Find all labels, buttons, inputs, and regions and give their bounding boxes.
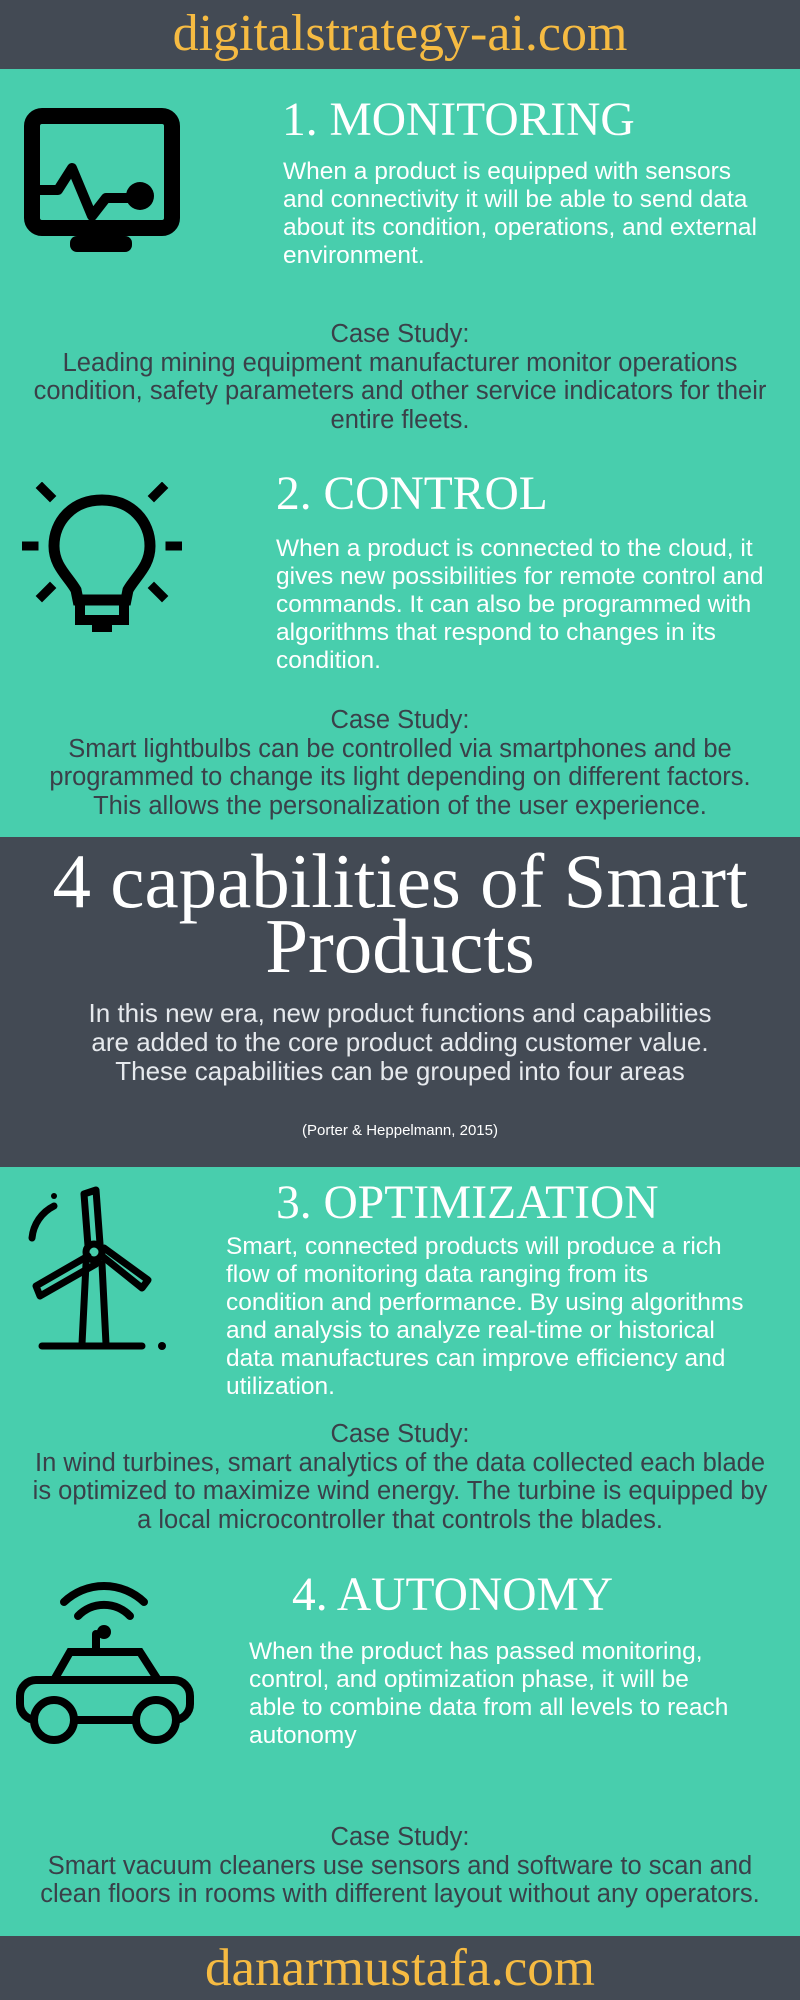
case study 3: Case Study: <box>331 1420 469 1448</box>
text: optimization: data manufactures can improve efficiency and <box>226 1345 725 1372</box>
text: control: condition. <box>276 647 381 674</box>
case study 4 <box>40 1823 760 1908</box>
heading: optimization: 3. OPTIMIZATION <box>276 1177 659 1229</box>
heading: monitoring: 1. MONITORING <box>282 94 635 146</box>
heading: control: 2. CONTROL <box>276 468 548 520</box>
text: autonomy: autonomy <box>249 1722 357 1749</box>
icon: wind turbine <box>28 1186 166 1350</box>
main title: Products <box>265 903 535 989</box>
case study 2: Case Study: <box>331 706 469 734</box>
icon: monitor <box>24 108 180 252</box>
footer bar <box>0 1936 800 2000</box>
case study 1 <box>34 320 766 434</box>
header bar: digitalstrategy-ai.com <box>173 5 627 62</box>
case study 4: clean floors in rooms with different layout without any operators. <box>40 1880 760 1908</box>
text: optimization: and analysis to analyze real-time or historical <box>226 1317 715 1344</box>
text: optimization: condition and performance. By using algorithms <box>226 1289 744 1316</box>
case study 1: entire fleets. <box>331 406 469 434</box>
main title <box>53 838 748 989</box>
icon: connected car <box>16 1582 194 1744</box>
text: autonomy: When the product has passed monitoring, <box>249 1638 703 1665</box>
text: monitoring: environment. <box>283 242 425 269</box>
intro text: In this new era, new product functions and capabilities <box>89 998 711 1028</box>
text: autonomy <box>249 1638 728 1749</box>
case study 1: Case Study: <box>331 320 469 348</box>
case study 3: a local microcontroller that controls the blades. <box>137 1506 663 1534</box>
intro text: These capabilities can be grouped into four areas <box>115 1056 685 1086</box>
text: optimization: flow of monitoring data ranging from its <box>226 1261 648 1288</box>
text: monitoring: about its condition, operations, and external <box>283 214 757 241</box>
header bar <box>0 0 800 69</box>
text: control <box>276 535 764 674</box>
icon: lightbulb <box>22 482 182 632</box>
case study 2: Smart lightbulbs can be controlled via smartphones and be <box>68 734 732 762</box>
case study 2 <box>49 706 751 820</box>
text: optimization: utilization. <box>226 1373 335 1400</box>
text: control: algorithms that respond to changes in its <box>276 619 716 646</box>
intro text <box>89 998 711 1086</box>
case study 3: In wind turbines, smart analytics of the data collected each blade <box>35 1448 765 1476</box>
text: control: gives new possibilities for remote control and <box>276 563 764 590</box>
text: monitoring: When a product is equipped with sensors <box>283 158 731 185</box>
text: control: When a product is connected to the cloud, it <box>276 535 753 562</box>
case study 3: is optimized to maximize wind energy. The turbine is equipped by <box>33 1477 767 1505</box>
main title: 4 capabilities of Smart <box>53 838 747 924</box>
text: autonomy: able to combine data from all levels to reach <box>249 1694 728 1721</box>
intro text: are added to the core product adding customer value. <box>91 1027 709 1057</box>
case study 1: Leading mining equipment manufacturer monitor operations <box>63 348 737 376</box>
case study 4: Case Study: <box>331 1823 469 1851</box>
case study 2: programmed to change its light depending on different factors. <box>49 763 751 791</box>
footer bar: danarmustafa.com <box>205 1939 595 1997</box>
citation: (Porter & Heppelmann, 2015) <box>302 1122 498 1139</box>
text: optimization: Smart, connected products will produce a rich <box>226 1233 722 1260</box>
case study 1: condition, safety parameters and other service indicators for their <box>34 377 766 405</box>
heading: autonomy: 4. AUTONOMY <box>292 1569 613 1621</box>
text: monitoring: and connectivity it will be able to send data <box>283 186 747 213</box>
case study 4: Smart vacuum cleaners use sensors and software to scan and <box>48 1852 752 1880</box>
text: autonomy: control, and optimization phase, it will be <box>249 1666 689 1693</box>
panel: intro <box>0 837 800 1167</box>
case study 3 <box>33 1420 768 1534</box>
case study 2: This allows the personalization of the user experience. <box>93 792 707 820</box>
text: optimization <box>226 1233 744 1400</box>
text: control: commands. It can also be programmed with <box>276 591 751 618</box>
text: monitoring <box>283 158 757 269</box>
